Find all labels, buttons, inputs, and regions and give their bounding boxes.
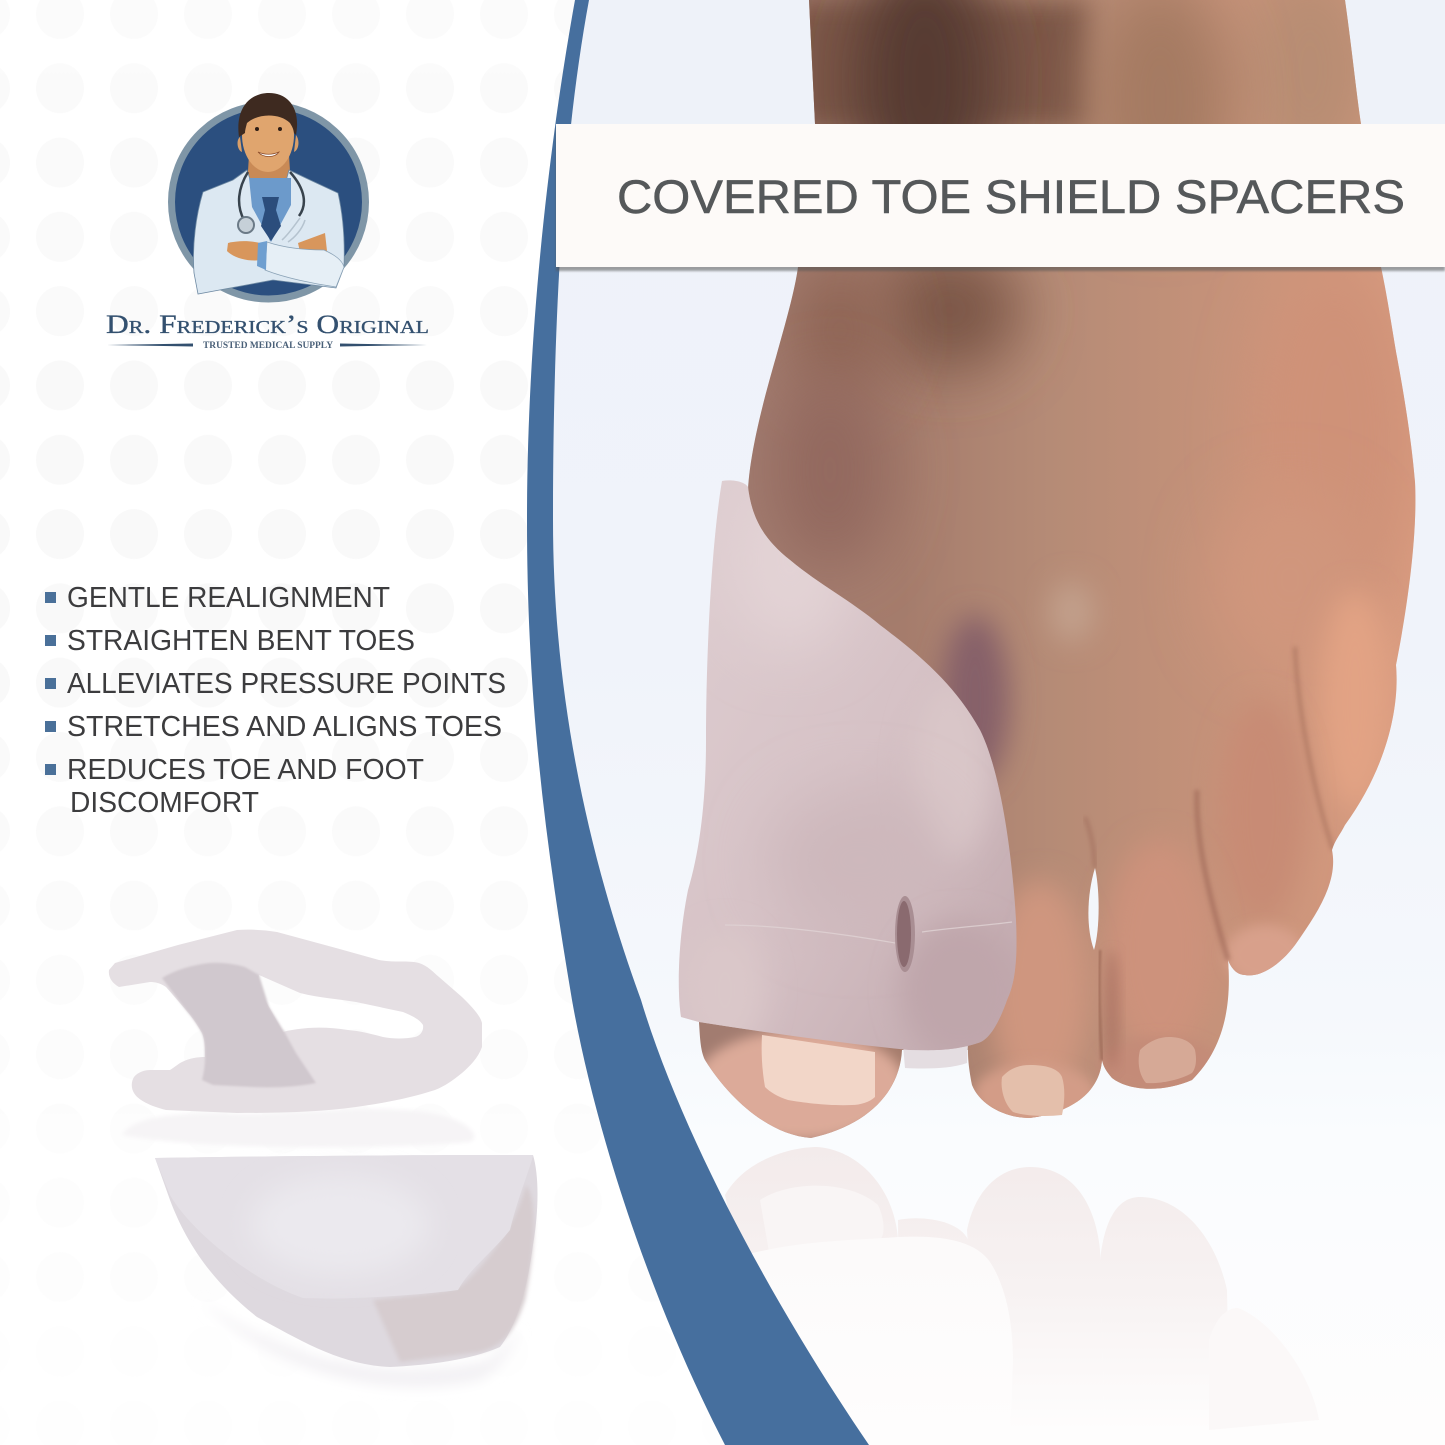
bullet 2: STRAIGHTEN BENT TOES [67,625,415,657]
toe gap [1088,868,1099,950]
cap shadow [200,1300,520,1387]
right hand [298,233,327,252]
cap inner right [373,1185,534,1362]
cuff [257,241,267,270]
hair [238,93,297,137]
shield reflection [745,1237,1013,1445]
bullet 5: REDUCES TOE AND FOOT [67,754,424,786]
bullet 3: ALLEVIATES PRESSURE POINTS [67,668,506,700]
doctor neck [247,155,291,205]
third toenail [1139,1037,1196,1083]
eyes [255,127,259,131]
silicone toe shield [678,480,1016,1050]
shirt [249,178,291,242]
face [242,98,294,172]
sleeve [265,242,344,287]
feature bullet list [45,582,506,819]
doctor coat [193,170,344,294]
second toenail [1002,1065,1064,1116]
cap upper surface [155,1155,533,1298]
cap body [155,1155,538,1367]
blue curved swoosh [527,0,869,1445]
logo tagline: TRUSTED MEDICAL SUPPLY [203,341,333,351]
polka dot pattern [0,0,800,1445]
spacer tab under shield [903,1043,968,1068]
title banner [556,124,1445,271]
bullet 5: DISCOMFORT [70,787,259,819]
logo emblem [172,93,366,299]
bullet 5 [45,754,424,819]
logo wordmark: Dr. Frederick’s Original [106,310,429,339]
right background [527,0,1445,1445]
spacer inner shade [162,963,316,1087]
foot reflection [725,1147,1319,1445]
ears [238,135,298,152]
product: spacer side view [109,930,482,1147]
cap highlight [250,1175,430,1275]
tie [261,197,281,241]
product: spacer front view [155,1155,538,1387]
spacer body [109,930,482,1113]
spacer reflection [122,1109,474,1147]
logo: Dr. Frederick's Original [106,93,429,351]
shield slit [895,896,915,972]
left background [0,0,800,1445]
bullet 1: GENTLE REALIGNMENT [67,582,390,614]
stethoscope [239,172,304,220]
title: COVERED TOE SHIELD SPACERS [617,170,1405,223]
smile [258,152,279,156]
left forearm [227,241,262,261]
foot photo [670,0,1430,1150]
bullet 4: STRETCHES AND ALIGNS TOES [67,711,502,743]
big toenail [762,1035,875,1105]
